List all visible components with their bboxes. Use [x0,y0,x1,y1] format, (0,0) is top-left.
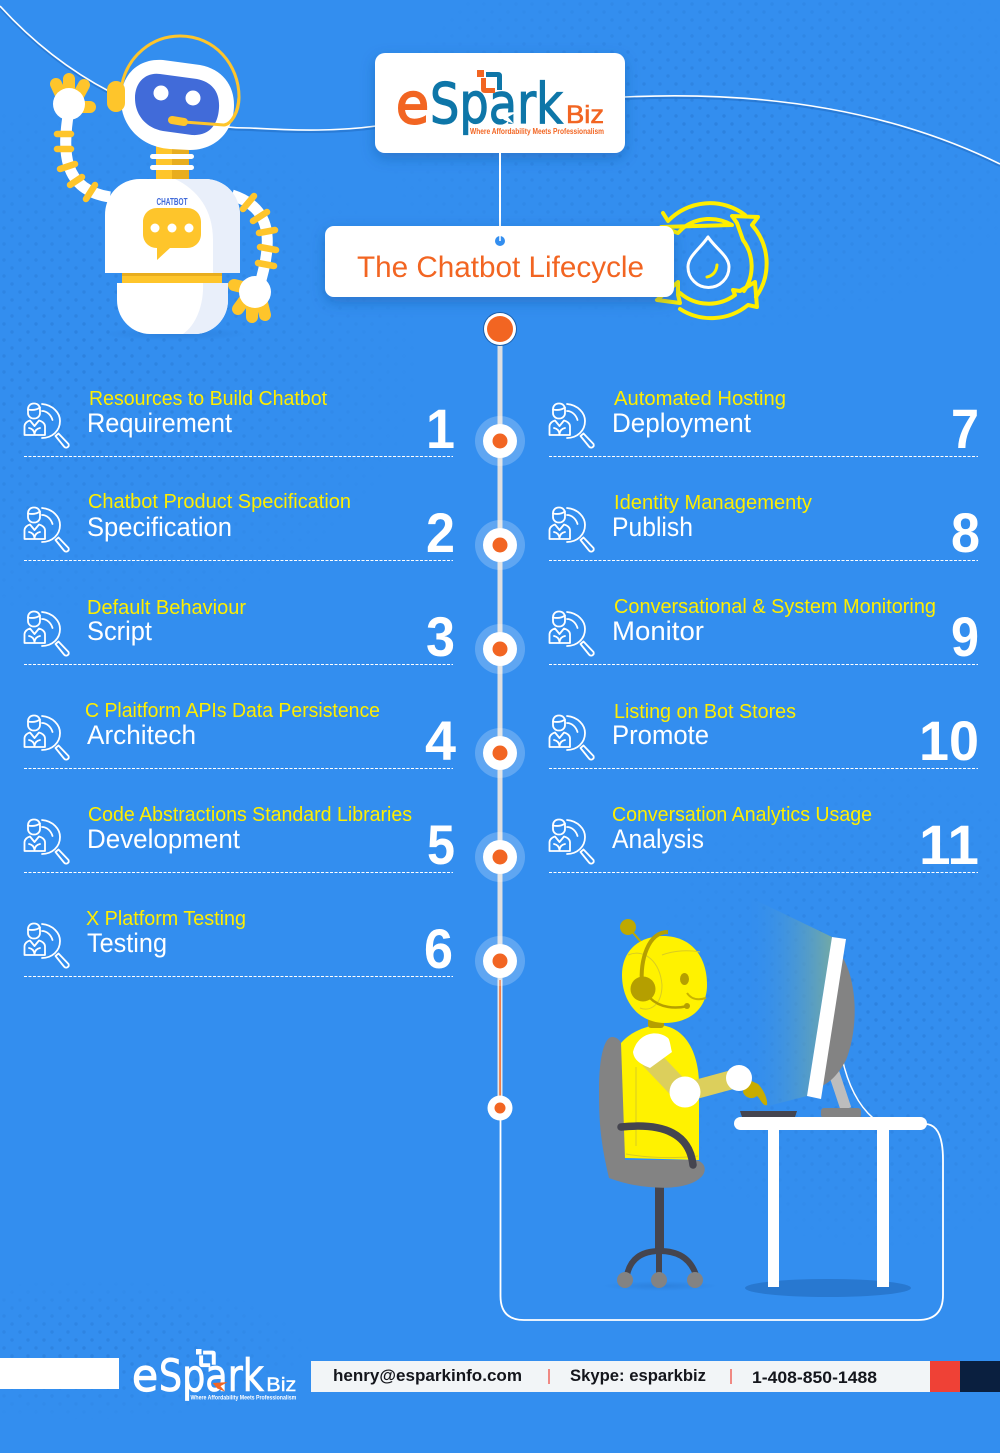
icon: lifecycle arrows with water drop [657,203,767,318]
step 11: Analysis: 11 [919,813,979,876]
connector: logo to title [499,153,501,228]
step 8: Publish: Publish [612,512,693,542]
step 6: Testing [24,908,453,980]
step 10: Promote: 10 [919,709,979,772]
logo wordmark: e [396,72,429,137]
step 7: Deployment: Deployment [612,408,752,438]
step 4: Architech: Architech [87,720,196,750]
footer logo: Biz [266,1374,296,1396]
step 9: Monitor [549,596,979,668]
robot body [621,1018,699,1165]
step 3: Script: Default Behaviour [87,597,246,619]
chest label: CHATBOT [156,197,188,208]
robot arm [633,1033,767,1108]
step 2: Specification: 2 [426,501,455,564]
desk and monitor [734,937,927,1297]
step 4: Architech: 4 [425,709,456,772]
title: The Chatbot Lifecycle [357,251,644,284]
robot head with headset [620,919,707,1023]
step 9: Monitor: 9 [951,605,979,668]
step 6: Testing: X Platform Testing [86,908,246,930]
step 7: Deployment [549,388,979,460]
icon: chat bubble [143,208,201,260]
timeline node 6 [475,936,525,986]
step 9: Monitor: Conversational & System Monitoring [614,596,936,618]
step 5: Development: Code Abstractions Standard Libraries [88,804,412,826]
step 8: Publish: Identity Managementy [614,492,812,514]
step 8: Publish [549,492,980,564]
step 4: Architech [24,700,456,772]
step 11: Analysis: Conversation Analytics Usage [612,804,872,826]
step 10: Promote: Promote [612,720,709,750]
timeline node 4 [475,728,525,778]
step 9: Monitor: Monitor [612,616,704,646]
cable from timeline to desk [500,1120,943,1320]
logo card [375,53,625,153]
step 2: Specification: Specification [87,512,232,542]
contact skype: Skype: esparkbiz [570,1366,706,1385]
contact email: henry@esparkinfo.com [333,1366,522,1385]
step 4: Architech: C Plaitform APIs Data Persistence [85,700,380,722]
step 10: Promote [549,701,979,772]
timeline start node [483,312,517,346]
title dot [495,236,505,246]
timeline node 3 [475,624,525,674]
step 2: Specification [24,491,455,564]
step 7: Deployment: Automated Hosting [614,388,786,410]
step 8: Publish: 8 [951,501,980,564]
timeline node 2 [475,520,525,570]
timeline end node [488,1096,512,1120]
step 10: Promote: Listing on Bot Stores [614,701,796,723]
step 5: Development: Development [87,824,241,854]
step 1: Requirement: Requirement [87,408,233,438]
footer contact bar [311,1361,1000,1392]
step 1: Requirement [24,388,455,460]
screen light beam [745,895,832,1112]
timeline node 5 [475,832,525,882]
title card [325,226,674,297]
step 2: Specification: Chatbot Product Specification [88,491,351,513]
step 6: Testing: 6 [424,917,453,980]
step 5: Development [24,804,455,876]
logo card: Spark [430,72,563,137]
step 1: Requirement: 1 [426,397,455,460]
step 5: Development: 5 [427,813,455,876]
footer logo: Spark [159,1351,264,1402]
step 1: Requirement: Resources to Build Chatbot [89,388,327,410]
connector curves [0,6,1000,166]
illustration: waving chatbot robot [53,36,276,341]
footer white strip [0,1358,119,1389]
logo card: Where Affordability Meets Professionalism [470,127,604,136]
timeline spine [498,330,502,1108]
illustration: robot working at a desk [599,895,927,1297]
step 6: Testing: Testing [87,928,167,958]
contact phone: 1-408-850-1488 [752,1368,877,1387]
step 7: Deployment: 7 [951,397,979,460]
logo card: Biz [566,101,604,129]
step 3: Script [24,597,455,668]
timeline node 1 [475,416,525,466]
step 11: Analysis [549,804,979,876]
footer logo: e [132,1351,158,1402]
footer logo: Where Affordability Meets Professionalism [190,1395,297,1402]
office chair [599,1037,718,1291]
step 3: Script: Script [87,616,153,646]
step 3: Script: 3 [426,605,455,668]
step 11: Analysis: Analysis [612,824,704,854]
